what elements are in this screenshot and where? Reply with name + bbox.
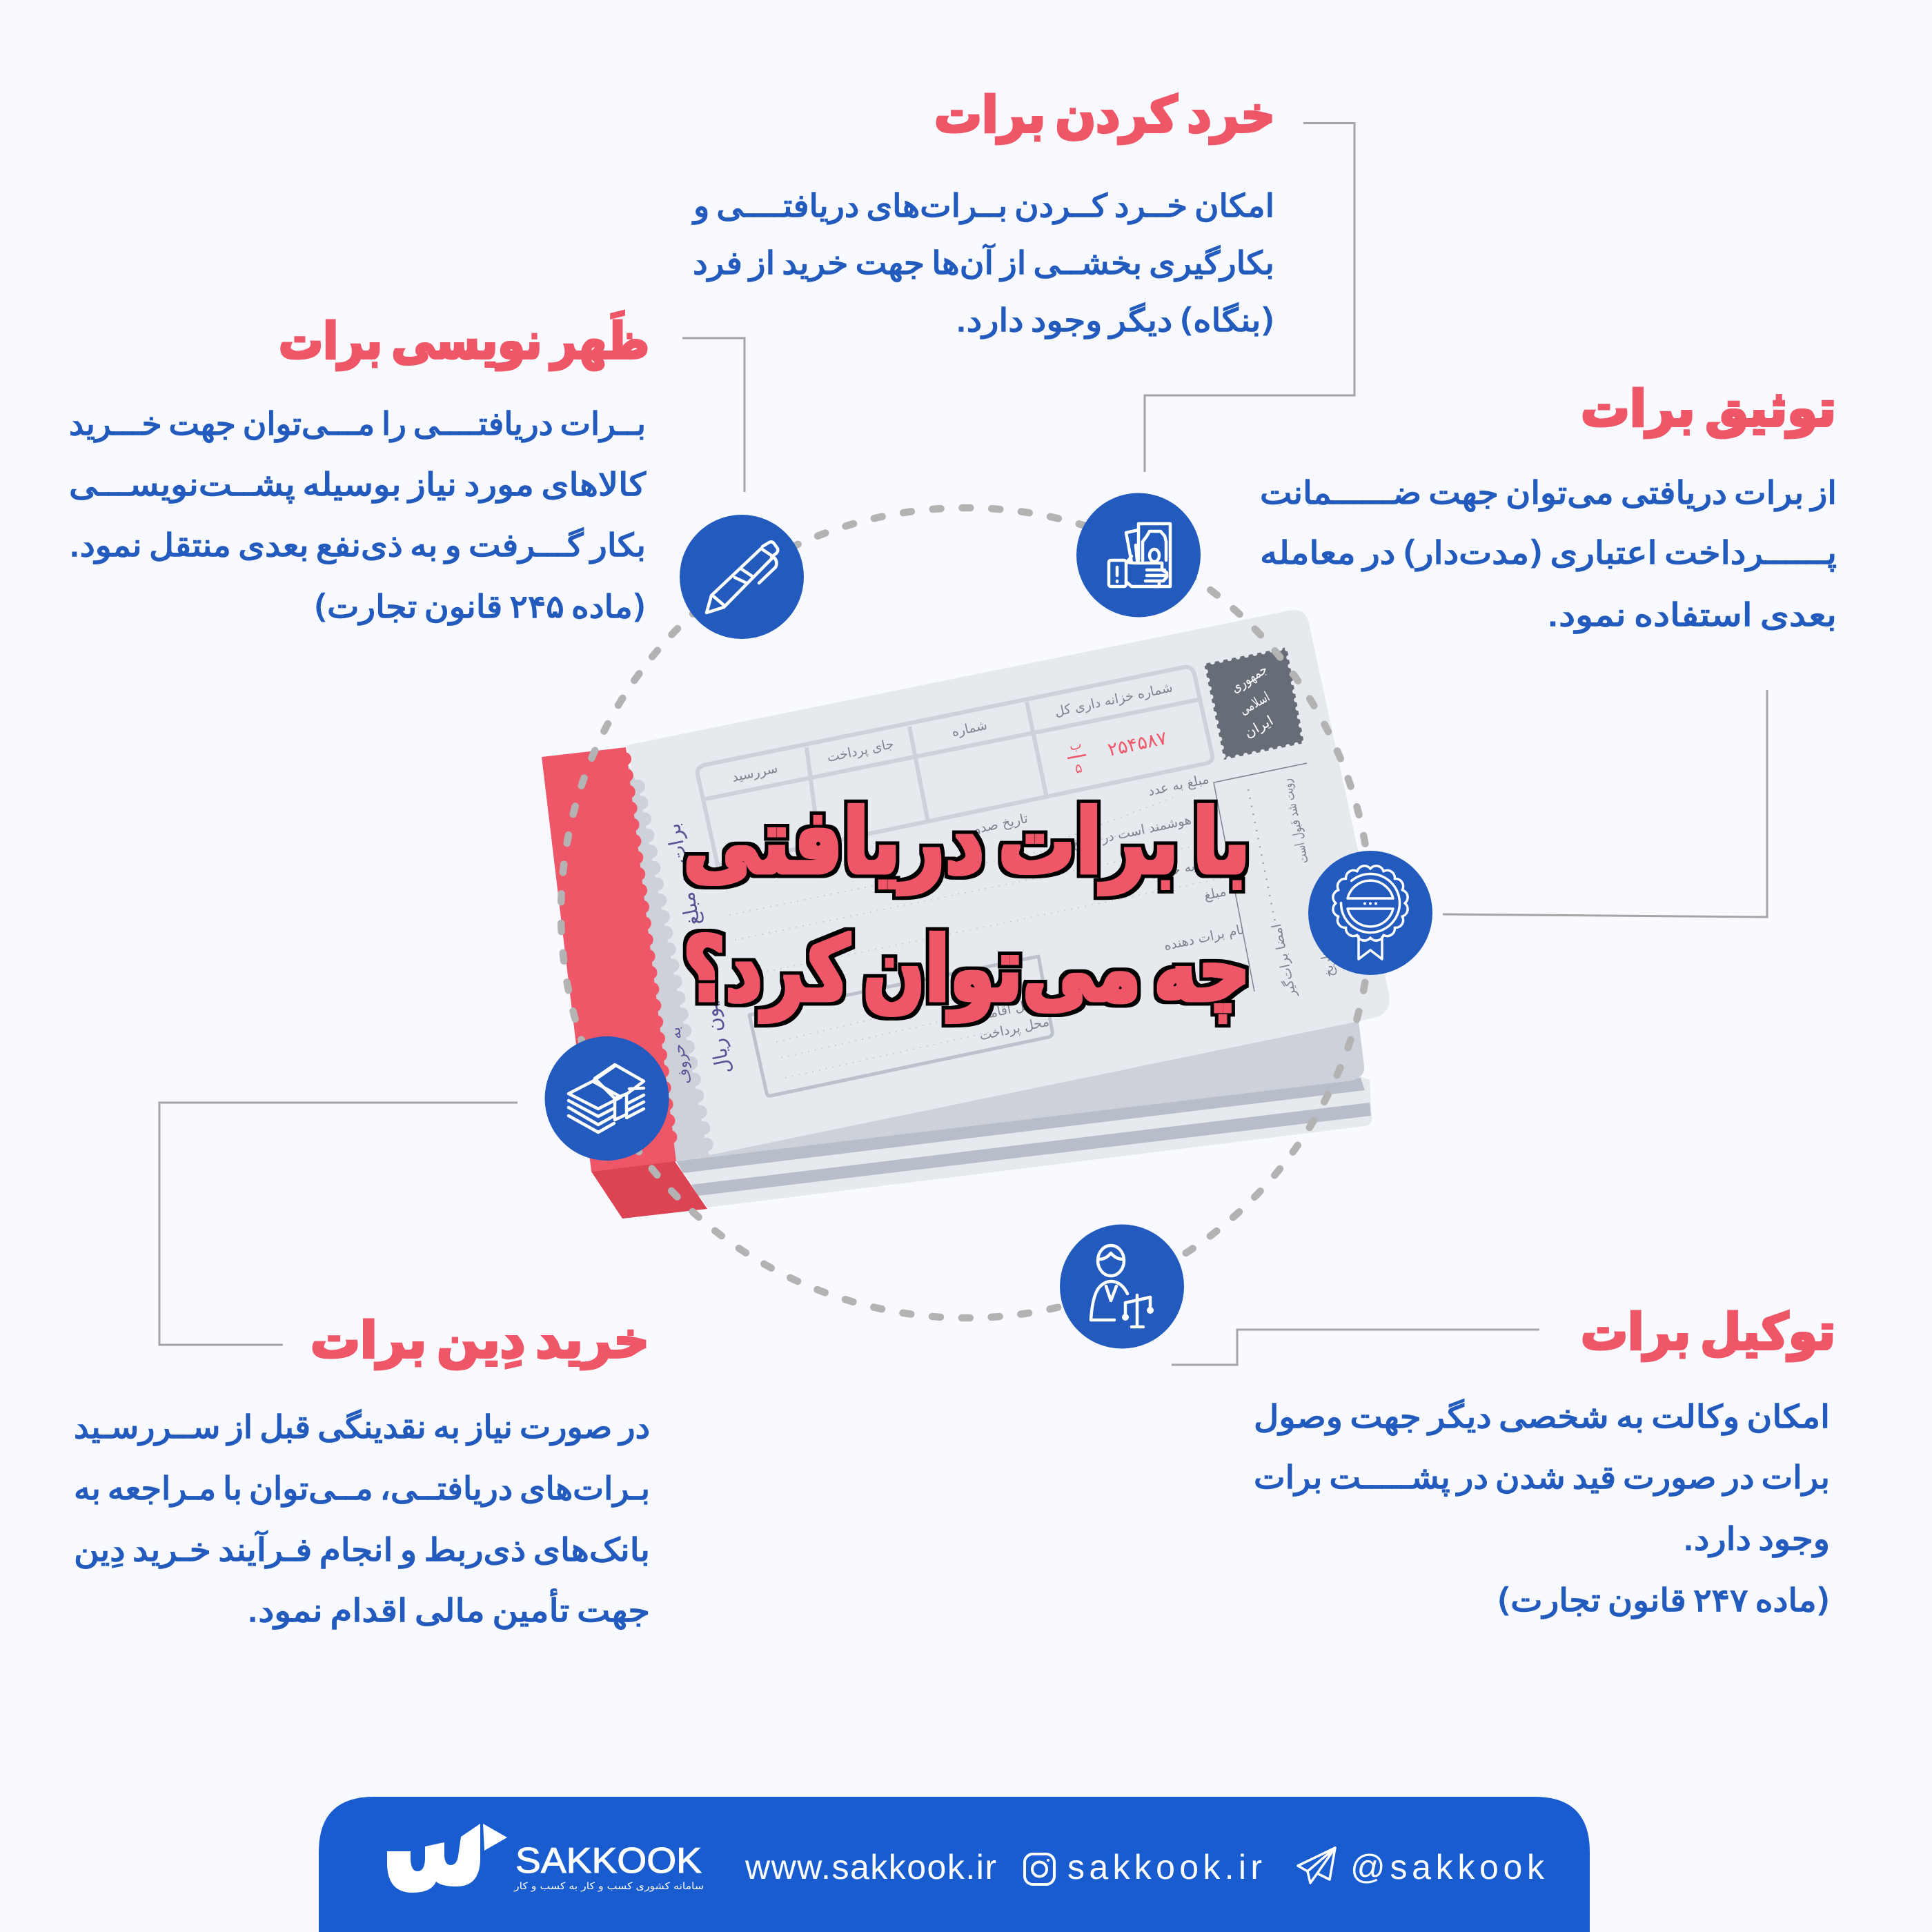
- body text: [74, 1408, 650, 1630]
- body text: بـرات‌های دریافتــی، مــی‌توان با مـراجعه به: [74, 1470, 650, 1508]
- table labels: ۵: [1074, 760, 1083, 777]
- body text: (ماده ۲۴۷ قانون تجارت): [1497, 1581, 1830, 1619]
- telegram handle: @sakkook: [1350, 1848, 1545, 1886]
- body text: [69, 405, 646, 626]
- booklet dark stripe upper: [676, 1078, 1365, 1173]
- table box: [698, 667, 1212, 865]
- body text: [1260, 474, 1837, 634]
- connector: endorsement block: [682, 338, 745, 492]
- connector: notarize block: [1443, 690, 1767, 917]
- main title: [683, 789, 1250, 1023]
- acceptance box: رویت شد قبول است: [1279, 778, 1312, 865]
- top sheet: [627, 610, 1390, 1155]
- footer background: [319, 1797, 1590, 1932]
- body text: جهت تأمین مالی اقدام نمود.: [247, 1588, 650, 1630]
- address box: محل پرداخت: [978, 1014, 1051, 1043]
- form labels: به حواله: [1150, 859, 1196, 883]
- form labels: [966, 771, 1245, 954]
- logo tagline: سامانه کشوری کسب و کار به کسب و کار: [513, 1881, 704, 1892]
- heading: ظَهر نویسی برات: [279, 310, 649, 371]
- title line 1: با برات دریافتی: [683, 789, 1250, 895]
- vertical purple text: به حروف: [667, 1025, 695, 1086]
- table labels: [731, 680, 1174, 785]
- acceptance box: در تاریخ: [1314, 934, 1338, 978]
- body text: (ماده ۲۴۵ قانون تجارت): [314, 588, 646, 626]
- stamp: اسلامی: [1236, 688, 1272, 718]
- connector: top block: [1145, 123, 1354, 472]
- vertical purple text: برات به مبلغ شش میلیون ریال: [661, 821, 736, 1076]
- body text: (بنگاه) دیگر وجود دارد.: [956, 302, 1274, 339]
- block: endorsement: [69, 310, 649, 626]
- footer bar: [319, 1797, 1590, 1932]
- perforated stub: [623, 752, 709, 1161]
- logo wordmark: SAKKOOK: [515, 1841, 702, 1881]
- table labels: ب: [1068, 736, 1083, 754]
- website: www.sakkook.ir: [745, 1848, 996, 1886]
- table labels: شماره: [950, 718, 989, 740]
- body text: در صورت نیاز به نقدینگی قبل از ســررسـید: [74, 1408, 650, 1446]
- stamp: [1204, 647, 1304, 760]
- connector: proxy block: [1172, 1330, 1539, 1365]
- body text: امکان وکالت به شخصی دیگر جهت وصول: [1254, 1398, 1830, 1436]
- body text: پــــــرداخت اعتباری (مدت‌دار) در معامله: [1260, 534, 1837, 572]
- red cover edge: [591, 1161, 707, 1219]
- form labels: تاریخ صدور: [966, 811, 1029, 838]
- body text: از برات دریافتی می‌توان جهت ضــــــمانت: [1260, 474, 1837, 512]
- body text: [692, 187, 1274, 339]
- dashed ring: [561, 508, 1371, 1318]
- block: discounting: [74, 1311, 650, 1630]
- instagram handle: sakkook.ir: [1067, 1848, 1262, 1886]
- heading: توثیق برات: [1581, 379, 1836, 438]
- acceptance box: امضا برات‌گیر: [1268, 923, 1299, 999]
- booklet dark stripe lower: [691, 1103, 1371, 1196]
- body text: بعدی استفاده نمود.: [1547, 596, 1837, 634]
- icon: stack of money: [545, 1036, 669, 1161]
- curled page: [676, 1021, 1364, 1161]
- stamp: ایران: [1241, 712, 1276, 741]
- body text: بکار گـــرفت و به ذی‌نفع بعدی منتقل نمود.: [69, 526, 646, 564]
- red cover: [542, 747, 676, 1172]
- form labels: مبلغ به عدد: [1147, 771, 1210, 799]
- dotted form lines: [729, 798, 1221, 976]
- table labels: شماره خزانه داری کل: [1054, 680, 1174, 720]
- stamp: جمهوری: [1228, 660, 1270, 696]
- icon: telegram: [1298, 1848, 1335, 1883]
- acceptance box: [1214, 763, 1338, 999]
- body text: کالاهای مورد نیاز بوسیله پشــت‌نویســـی: [69, 466, 646, 504]
- icon: lawyer with scales: [1060, 1224, 1184, 1348]
- body text: بــرات دریافتــــی را مـــی‌توان جهت خـــرید: [69, 405, 646, 443]
- table labels: جای پرداخت: [826, 736, 895, 765]
- connector: discount block: [159, 1103, 518, 1345]
- icon: seal badge: [1308, 851, 1432, 975]
- title line 2: چه می‌توان کرد؟: [683, 917, 1250, 1023]
- body text: بانک‌های ذی‌ربط و انجام فـرآیند خـرید دِین: [74, 1531, 650, 1569]
- table labels: ۲۵۴۵۸۷: [1106, 727, 1169, 761]
- heading: توکیل برات: [1581, 1303, 1835, 1361]
- body text: امکان خــرد کــردن بــرات‌های دریافتــــی و: [692, 187, 1274, 225]
- block: notarize: [1260, 379, 1837, 634]
- icon: pen: [680, 515, 804, 639]
- icon: hand holding money: [1076, 493, 1201, 617]
- table labels: سررسید: [731, 760, 779, 785]
- booklet base pages: [676, 1076, 1372, 1208]
- heading: خرید دِین برات: [310, 1311, 649, 1370]
- address box: محل اقامت: [976, 996, 1041, 1023]
- block: shrink note: [692, 86, 1275, 339]
- block: proxy: [1254, 1303, 1835, 1619]
- icon: instagram: [1025, 1854, 1054, 1884]
- body text: برات در صورت قید شدن در پشـــــت برات: [1254, 1459, 1830, 1497]
- form labels: مبلغ: [1203, 884, 1228, 903]
- address box: [749, 956, 1052, 1096]
- form labels: هوشمند است در تاریخ: [1071, 812, 1192, 852]
- logo mark: [387, 1824, 507, 1893]
- illustration: promissory note booklet: [542, 610, 1390, 1219]
- form labels: نام برات دهنده: [1163, 922, 1245, 954]
- heading: خرد کردن برات: [934, 86, 1275, 144]
- body text: بکارگیری بخشــی از آن‌ها جهت خرید از فرد: [693, 244, 1274, 282]
- body text: وجود دارد.: [1683, 1520, 1830, 1558]
- body text: [1254, 1398, 1830, 1619]
